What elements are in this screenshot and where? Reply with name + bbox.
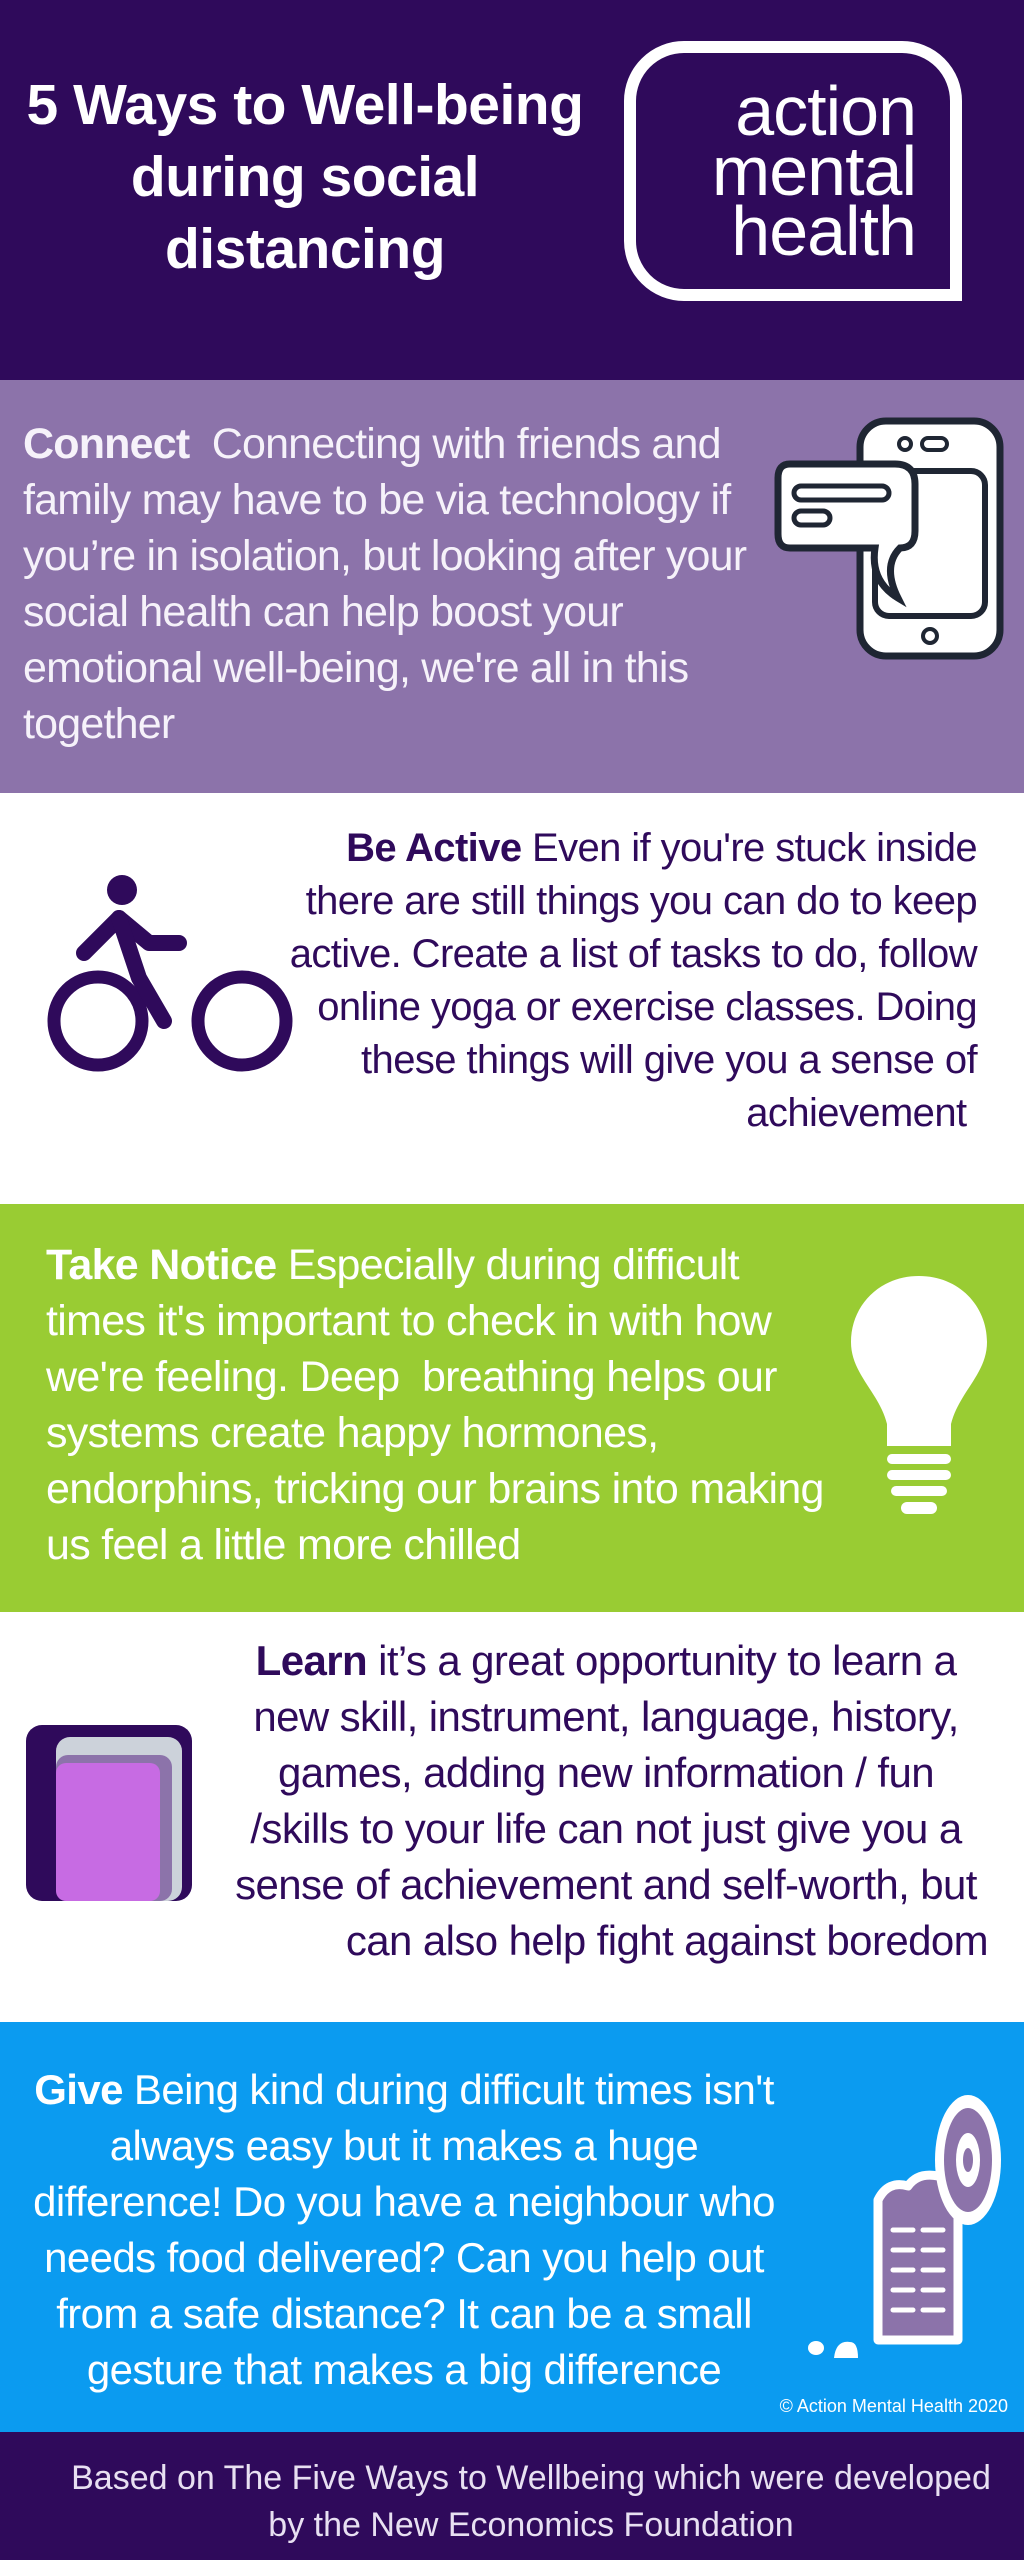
text: be active <box>290 826 978 1135</box>
icon: light bulb <box>851 1276 987 1514</box>
text: give: Give Being kind during difficult times isn't <box>34 2066 774 2113</box>
text: connect: you’re in isolation, but looking after your <box>23 532 746 580</box>
text: take notice: times it's important to check in with how <box>46 1297 771 1345</box>
panel: take notice <box>0 1204 1024 1612</box>
title: distancing <box>165 217 445 281</box>
text: take notice: us feel a little more chilled <box>46 1521 520 1569</box>
text: connect: family may have to be via technology if <box>23 476 730 524</box>
panel: learn <box>0 1612 1024 2022</box>
text: be active: online yoga or exercise classes. Doing <box>317 985 977 1029</box>
text: take notice: we're feeling. Deep breathing helps our <box>46 1353 777 1401</box>
footer text: Based on The Five Ways to Wellbeing which were developed <box>71 2459 991 2497</box>
text: learn: /skills to your life can not just give you a <box>250 1805 962 1852</box>
text: be active: active. Create a list of tasks to do, follow <box>290 932 977 976</box>
text: learn: new skill, instrument, language, history, <box>253 1693 959 1740</box>
text: connect: emotional well-being, we're all in this <box>23 644 688 692</box>
text: give: needs food delivered? Can you help out <box>44 2234 764 2281</box>
text: take notice: systems create happy hormones, <box>46 1409 658 1457</box>
text: learn <box>235 1637 988 1964</box>
panel: header <box>0 0 1024 380</box>
logo <box>624 41 962 301</box>
text: be active: Be Active Even if you're stuck inside <box>346 826 977 870</box>
text: be active: there are still things you can do to keep <box>306 879 977 923</box>
icon: phone with chat <box>774 418 1004 660</box>
logo: action <box>735 72 916 150</box>
logo: mental <box>712 132 916 210</box>
text: give: from a safe distance? It can be a small <box>56 2290 752 2337</box>
text: give <box>33 2066 775 2393</box>
text: give: difference! Do you have a neighbour who <box>33 2178 775 2225</box>
text: connect: social health can help boost your <box>23 588 623 636</box>
text: take notice: endorphins, tricking our brains into making <box>46 1465 824 1513</box>
copyright: © Action Mental Health 2020 <box>780 2396 1008 2416</box>
icon: book <box>26 1725 192 1901</box>
title: 5 Ways to Well-being <box>27 73 583 137</box>
text: take notice <box>46 1241 824 1569</box>
text: learn: sense of achievement and self-worth, but <box>235 1861 977 1908</box>
text: be active: achievement <box>746 1091 966 1135</box>
title <box>27 73 583 281</box>
panel: give <box>0 2022 1024 2432</box>
panel: connect <box>0 380 1024 793</box>
logo: health <box>731 192 916 270</box>
text: give: gesture that makes a big difference <box>87 2346 721 2393</box>
text: connect: Connect Connecting with friends and <box>23 420 721 468</box>
text: learn: games, adding new information / fun <box>278 1749 934 1796</box>
footer text: by the New Economics Foundation <box>268 2506 794 2544</box>
icon: toilet roll <box>808 2095 1001 2358</box>
text: give: always easy but it makes a huge <box>110 2122 698 2169</box>
text: learn: Learn it’s a great opportunity to learn a <box>256 1637 956 1684</box>
text: learn: can also help fight against boredom <box>346 1917 988 1964</box>
panel: be active <box>0 793 1024 1204</box>
icon: cyclist <box>48 875 292 1072</box>
panel: footer <box>0 2432 1024 2560</box>
title: during social <box>131 145 479 209</box>
text: be active: these things will give you a sense of <box>361 1038 977 1082</box>
footer text <box>71 2459 991 2544</box>
text: take notice: Take Notice Especially during difficult <box>46 1241 739 1289</box>
text: connect <box>23 420 746 748</box>
text: connect: together <box>23 700 174 748</box>
